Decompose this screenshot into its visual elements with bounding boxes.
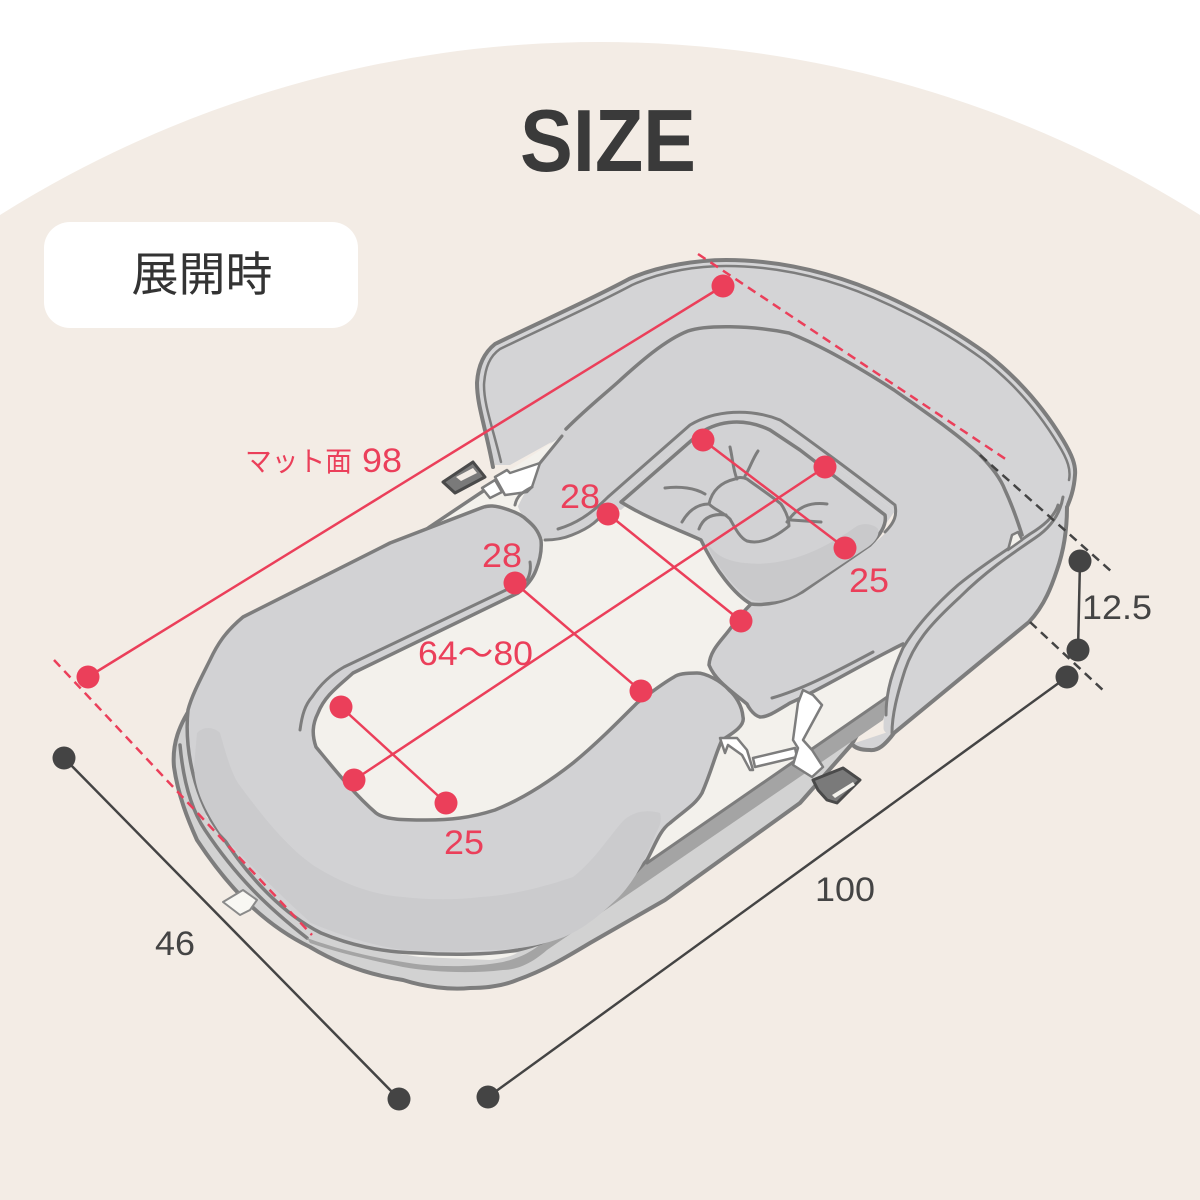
mat surface [200,440,900,945]
dimension: foot width 25 [330,696,484,862]
wall lip fill [889,500,1060,728]
mat edge lines [430,440,893,863]
wall lip seams [886,497,1063,733]
dimension: mat face 98: マット面 [245,446,352,477]
wall outline [477,260,1075,507]
dimension: head width 25: 25 [849,562,889,600]
dimension: length 100: 100 [815,871,875,909]
label: unfolded state: 展開時 [132,248,272,301]
dimension: foot width 25: 25 [444,824,484,862]
side wall [852,497,1067,750]
dark side strip [307,693,893,972]
dimension: head width 25 [692,428,889,600]
head cushion [621,422,885,604]
dashed guides: height [980,455,1112,692]
dimension: width 46: 46 [155,925,195,963]
side wall outline [852,507,1067,750]
strap line on pillow [772,652,873,698]
dimension: inner length 64-80: 64〜80 [418,635,533,673]
upper pillow outlines [566,327,1023,717]
lower U pillow [187,506,743,954]
dimension: mat face 98 [76,274,734,688]
head hole outlines [545,412,896,540]
dimension: height 12.5: 12.5 [1082,589,1152,627]
dashed guides: mat face [54,254,1010,935]
pillow inner seam [300,562,530,730]
dimension: middle width 28 [482,537,652,702]
dimension: upper width 28: 28 [560,478,600,516]
cushion face detail [665,447,827,542]
back wall [477,260,1075,560]
dimension: inner length 64-80 [342,456,836,792]
mat slivers [205,815,517,960]
wall notch [1008,532,1022,550]
title: SIZE [520,91,696,190]
dimension: middle width 28: 28 [482,537,522,575]
dimension: height 12.5 [1066,550,1152,662]
base shell [174,440,900,989]
upper pillow [516,327,1023,717]
cushion backing [608,413,895,525]
left buckle and strap [443,436,562,510]
right buckle and strap [720,690,860,803]
dimension: width 46 [52,746,410,1110]
cushion shade [705,524,878,602]
dimension: upper width 28 [560,478,752,632]
dimension: length 100 [476,666,1078,1108]
illustration: baby nest bed [174,260,1075,989]
inner base line [180,745,307,938]
zipper tab [223,890,257,915]
pillow shade [194,728,661,952]
label: unfolded state [44,222,358,328]
dimension: mat face 98: 98 [362,442,402,480]
wall inner seam [484,266,1070,480]
